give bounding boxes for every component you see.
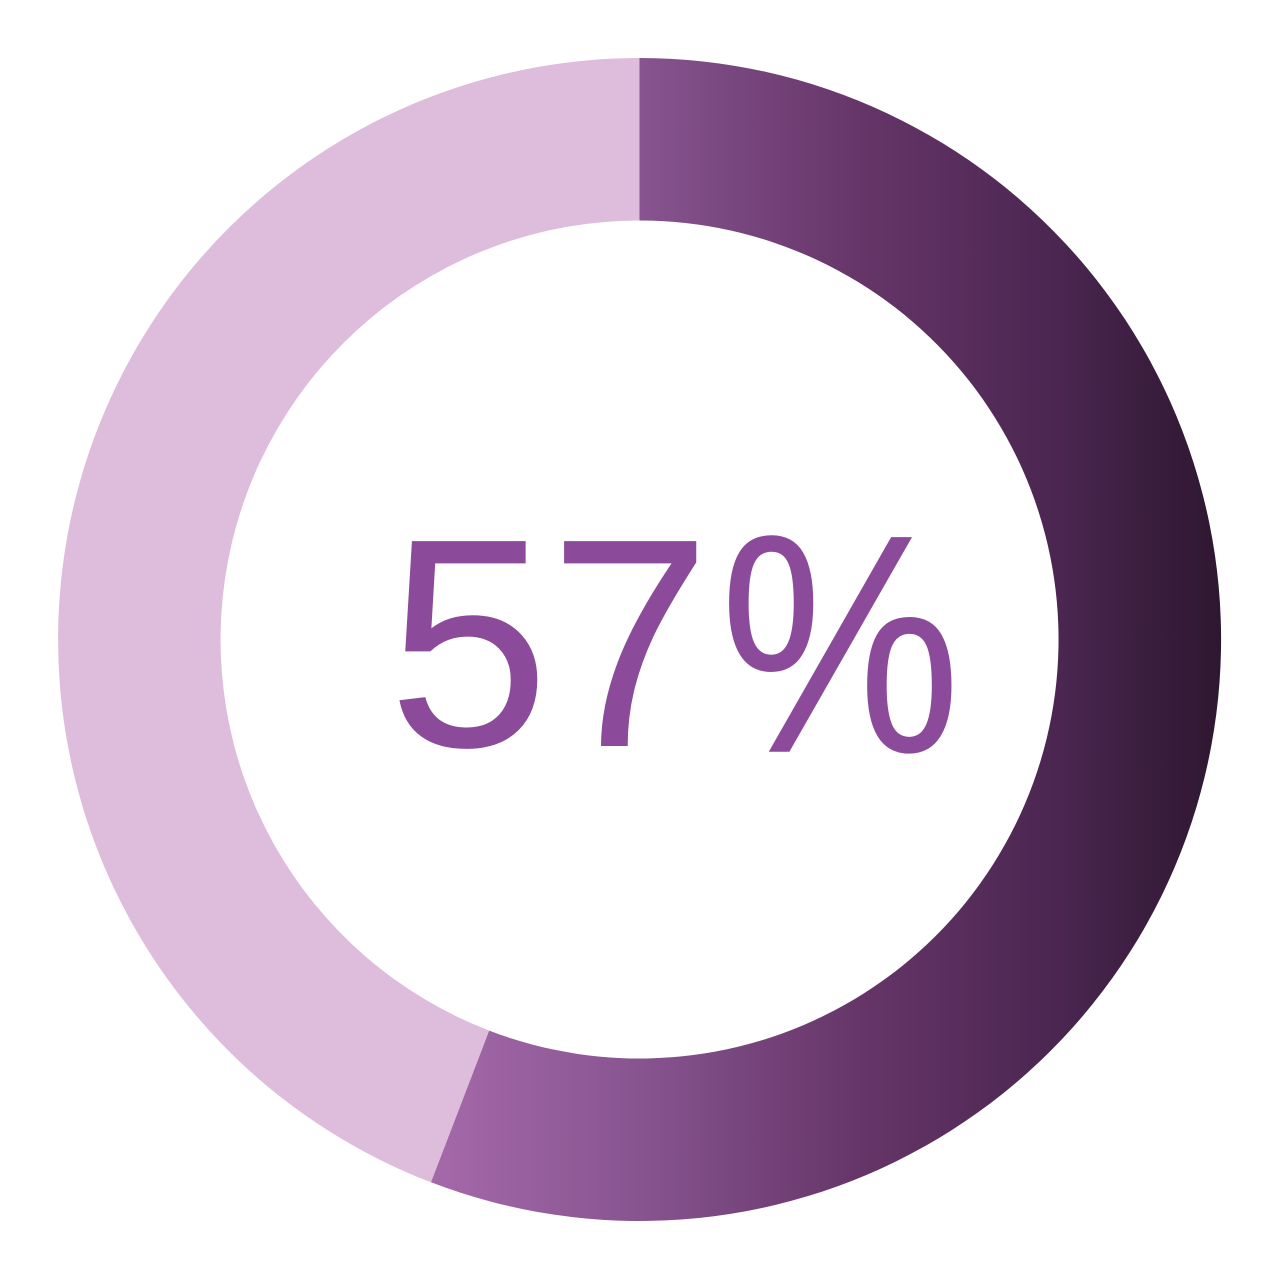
center percentage label: 5 bbox=[388, 478, 549, 810]
center percentage label bbox=[388, 470, 961, 819]
highlighted segment bbox=[431, 58, 1221, 1221]
remaining segment bbox=[58, 58, 639, 1182]
center percentage label: 7 bbox=[549, 478, 711, 810]
center percentage label: % bbox=[719, 470, 961, 819]
